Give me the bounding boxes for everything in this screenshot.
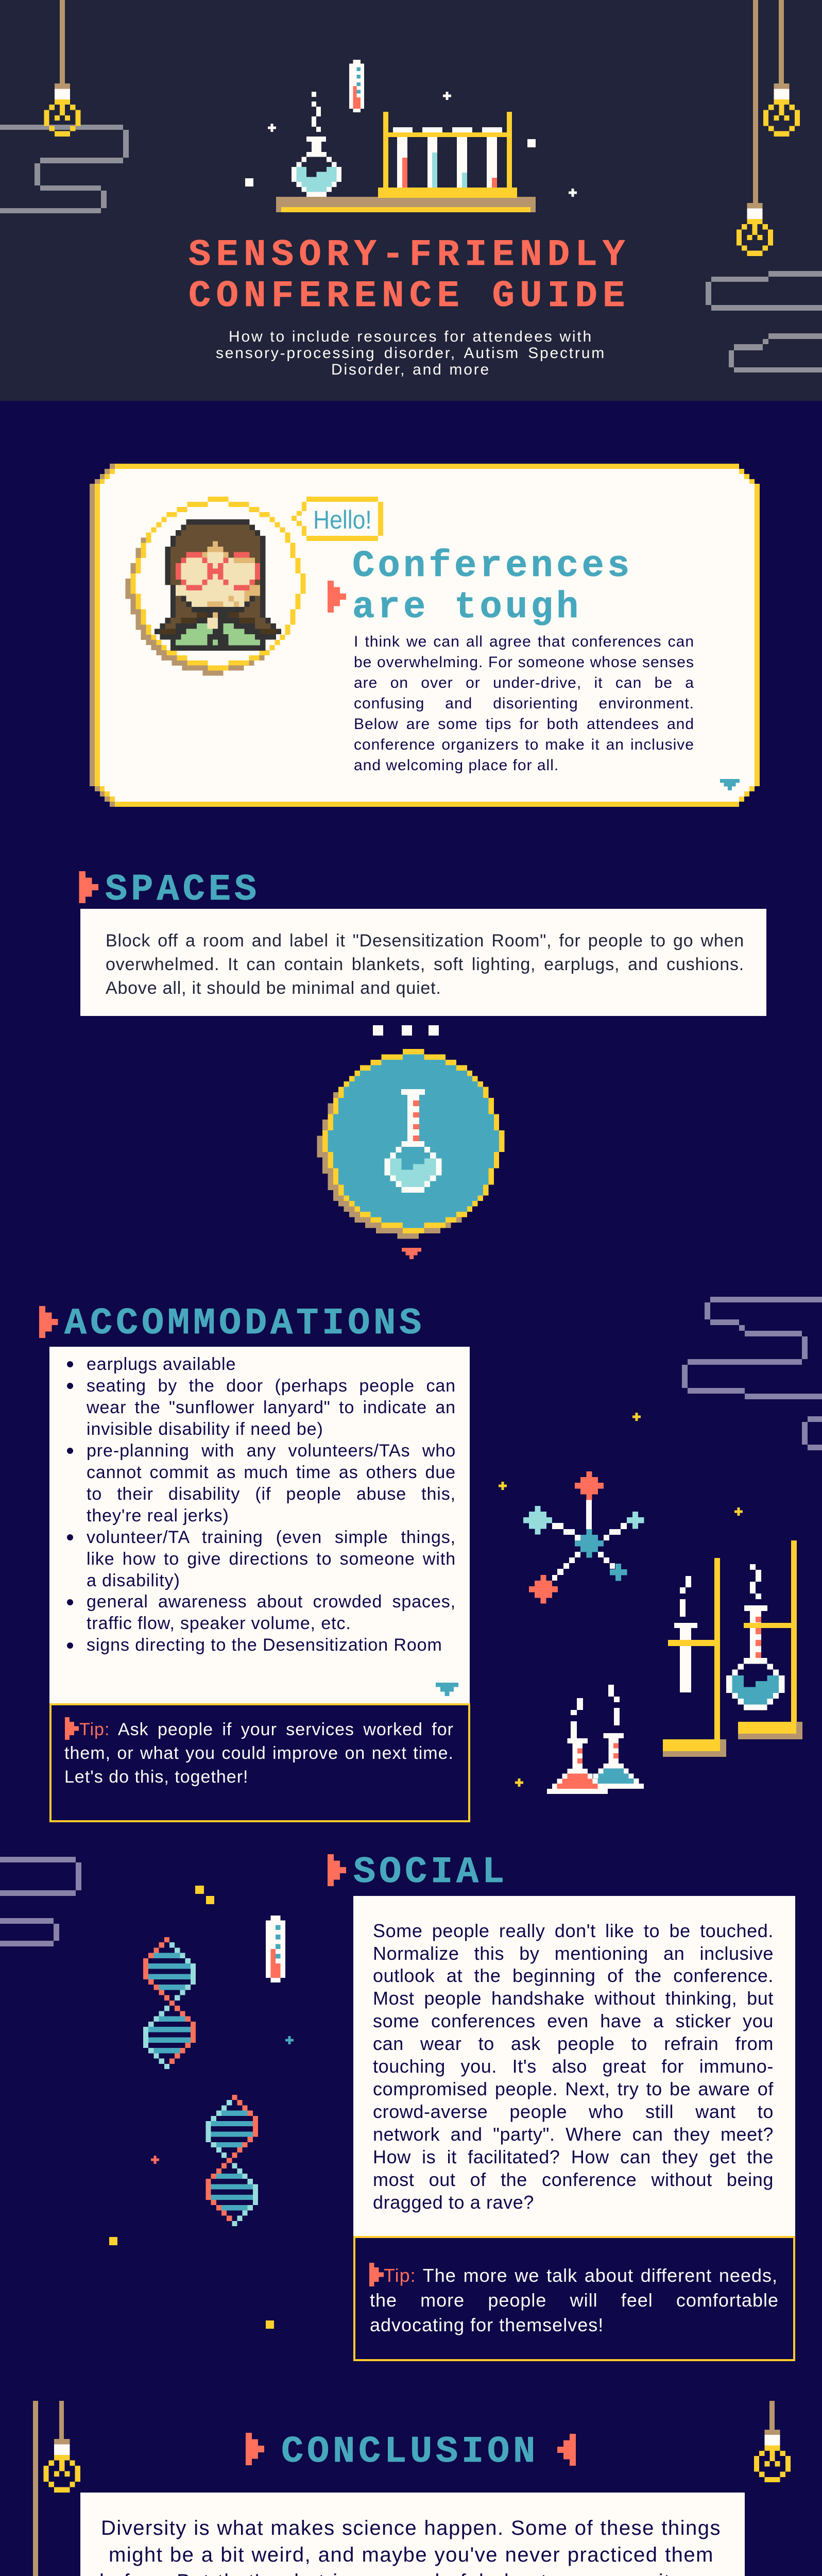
heading: conferences are tough: are tough xyxy=(352,586,582,629)
text: tip: advocating for themselves! xyxy=(370,2314,604,2335)
text: social body: touching you. It's also great for immuno- xyxy=(373,2056,774,2077)
text: accommodations list: wear the "sunflower lanyard" to indicate an xyxy=(87,1398,456,1417)
text: tip: Tip: The more we talk about different needs, xyxy=(384,2265,778,2285)
callout: social tip xyxy=(353,2236,795,2361)
text: social body: some conferences even have a sticker you xyxy=(373,2010,774,2031)
text: social body: can wear to ask people to refrain from xyxy=(373,2033,774,2054)
icon: conclusion bulb one xyxy=(43,2401,80,2493)
social sparkles xyxy=(109,1886,294,2329)
text: tip: the more people will feel comfortable xyxy=(370,2290,779,2310)
subtitle: How to include resources for attendees with xyxy=(229,328,593,345)
callout: accommodations tip xyxy=(49,1703,470,1822)
title xyxy=(189,234,630,317)
bullets xyxy=(67,1361,73,1649)
icon: social test tube xyxy=(266,1916,285,1982)
text: accommodations list: like how to give directions to someone with xyxy=(87,1549,456,1569)
icon: molecule xyxy=(523,1471,644,1603)
subtitle: sensory-processing disorder, Autism Spectrum xyxy=(216,345,606,362)
text: tip: Tip: Ask people if your services worked for xyxy=(79,1720,454,1739)
text: accommodations list: earplugs available xyxy=(87,1354,236,1374)
panel: accommodations list xyxy=(49,1347,470,1704)
title: SENSORY-FRIENDLY xyxy=(189,234,630,276)
text: accommodations list: volunteer/TA training (even simple things, xyxy=(87,1528,456,1547)
text: spaces body: overwhelmed. It can contain blankets, soft lighting, earplugs, and cushions. xyxy=(106,955,744,974)
text: social body: outlook at the beginning of the conference. xyxy=(373,1965,774,1986)
icon: social marker xyxy=(328,1854,346,1886)
text: accommodations list: to their disability (if people abuse this, xyxy=(87,1484,456,1504)
text: accommodations list: traffic flow, speaker volume, etc. xyxy=(87,1614,351,1633)
text: tip xyxy=(370,2265,779,2335)
social clouds xyxy=(0,1857,81,1946)
text: accommodations list: a disability) xyxy=(87,1571,180,1590)
icon: red conical flask xyxy=(547,1738,608,1794)
accommodations clouds xyxy=(682,1297,822,1450)
icon: spaces down arrow xyxy=(402,1248,421,1259)
text: conclusion body xyxy=(99,2517,724,2576)
text: tip: them, or what you could improve on next time. xyxy=(64,1743,454,1763)
icon: red flask vapour xyxy=(571,1698,583,1738)
accommodations sparkles xyxy=(499,1413,743,1787)
icon: header lab scene xyxy=(245,60,577,212)
icon: intro down arrow xyxy=(720,779,740,790)
icon: conclusion bulb three xyxy=(16,2401,54,2576)
text: intro body: I think we can all agree that conferences can xyxy=(354,633,694,650)
icon: spaces flask medallion xyxy=(317,1049,505,1239)
text: accommodations list: cannot commit as much time as others due xyxy=(87,1463,456,1482)
subtitle: Disorder, and more xyxy=(331,361,490,378)
icon: spaces three dots xyxy=(373,1025,439,1036)
icon: header bulb left xyxy=(44,0,80,137)
text: social body: Most people handshake without thinking, but xyxy=(373,1988,774,2009)
icon: social tip marker xyxy=(369,2263,384,2286)
icon: dna strand one xyxy=(143,1937,196,2069)
text: spaces body xyxy=(106,931,744,998)
icon: conclusion bulb two xyxy=(754,2401,791,2482)
text: intro body: Below are some tips for both attendees and xyxy=(354,716,694,733)
panel: spaces xyxy=(80,909,766,1016)
icon: teal conical flask xyxy=(583,1733,644,1789)
text: social body: most out of the conference without being xyxy=(373,2169,774,2190)
text: social body xyxy=(373,1920,774,2213)
heading: spaces: SPACES xyxy=(105,869,260,911)
panel: conclusion xyxy=(80,2493,745,2576)
icon: portrait ring xyxy=(125,497,305,676)
icon: accommodations down arrow xyxy=(436,1683,458,1696)
text: intro body: conference organizers to make it an inclusive xyxy=(354,736,694,753)
icon: accommodations marker xyxy=(39,1306,58,1338)
text: accommodations list: they're real jerks) xyxy=(87,1506,229,1526)
text: social body: Some people really don't like to be touched. xyxy=(373,1920,774,1941)
icon: intro marker xyxy=(328,581,346,613)
heading: accommodations: ACCOMMODATIONS xyxy=(64,1302,425,1345)
text: spaces body: Block off a room and label it "Desensitization Room", for people to go when xyxy=(106,931,744,951)
subtitle xyxy=(216,328,606,378)
text: intro body: be overwhelming. For someone whose senses xyxy=(354,654,694,671)
icon: accommodations tip marker xyxy=(65,1717,79,1740)
text: hello: Hello! xyxy=(313,505,372,534)
icon: teal flask vapour xyxy=(608,1685,620,1725)
text: accommodations list: pre-planning with any volunteers/TAs who xyxy=(87,1441,456,1461)
heading: conclusion: CONCLUSION xyxy=(281,2431,539,2473)
text: conclusion body: might be a bit weird, and maybe you've never practiced them xyxy=(109,2544,714,2566)
text: accommodations list: signs directing to the Desensitization Room xyxy=(87,1635,442,1655)
icon: dna strand two xyxy=(206,2095,258,2226)
text: intro body xyxy=(354,633,694,774)
text: tip: Let's do this, together! xyxy=(64,1767,248,1787)
text: social body: network and "party". Where can they meet? xyxy=(373,2124,774,2145)
text: tip xyxy=(64,1720,454,1787)
icon: stand with round flask xyxy=(726,1540,802,1739)
text: accommodations list: general awareness about crowded spaces, xyxy=(87,1592,456,1612)
text: accommodations list: invisible disability if need be) xyxy=(87,1419,323,1439)
text: conclusion body: Diversity is what makes science happen. Some of these things xyxy=(101,2517,721,2539)
title: CONFERENCE GUIDE xyxy=(189,275,630,317)
text: social body: compromised people. Next, try to be aware of xyxy=(373,2078,774,2099)
icon: stand with test tube xyxy=(663,1558,726,1757)
icon: conclusion markers xyxy=(246,2433,576,2466)
panel: social xyxy=(353,1896,795,2236)
text: social body: dragged to a rave? xyxy=(373,2192,534,2213)
text: intro body: are on over or under-drive, it can be a xyxy=(354,674,694,691)
panel: intro card frame xyxy=(90,464,760,807)
text: intro body: confusing and disorienting environment. xyxy=(354,695,694,712)
icon: hello speech bubble xyxy=(292,497,383,541)
heading: social: SOCIAL xyxy=(353,1851,508,1893)
text: intro body: and welcoming place for all. xyxy=(354,757,559,774)
icon: portrait of person xyxy=(155,519,281,651)
text: accommodations list xyxy=(87,1354,456,1655)
icon: spaces marker xyxy=(79,871,98,903)
icon: header bulb right xyxy=(763,0,800,137)
text: social body: crowd-averse people who still want to xyxy=(373,2101,774,2122)
header band xyxy=(0,0,822,401)
text: accommodations list: seating by the door (perhaps people can xyxy=(87,1376,456,1396)
text: social body: Normalize this by mentioning an inclusive xyxy=(373,1943,774,1964)
icon: header bulb long xyxy=(737,0,773,256)
text: spaces body: Above all, it should be minimal and quiet. xyxy=(106,978,441,998)
heading: conferences are tough xyxy=(352,545,633,629)
header clouds xyxy=(0,125,822,372)
heading: conferences are tough: Conferences xyxy=(352,545,633,587)
text: social body: How is it facilitated? How can they get the xyxy=(373,2146,774,2167)
